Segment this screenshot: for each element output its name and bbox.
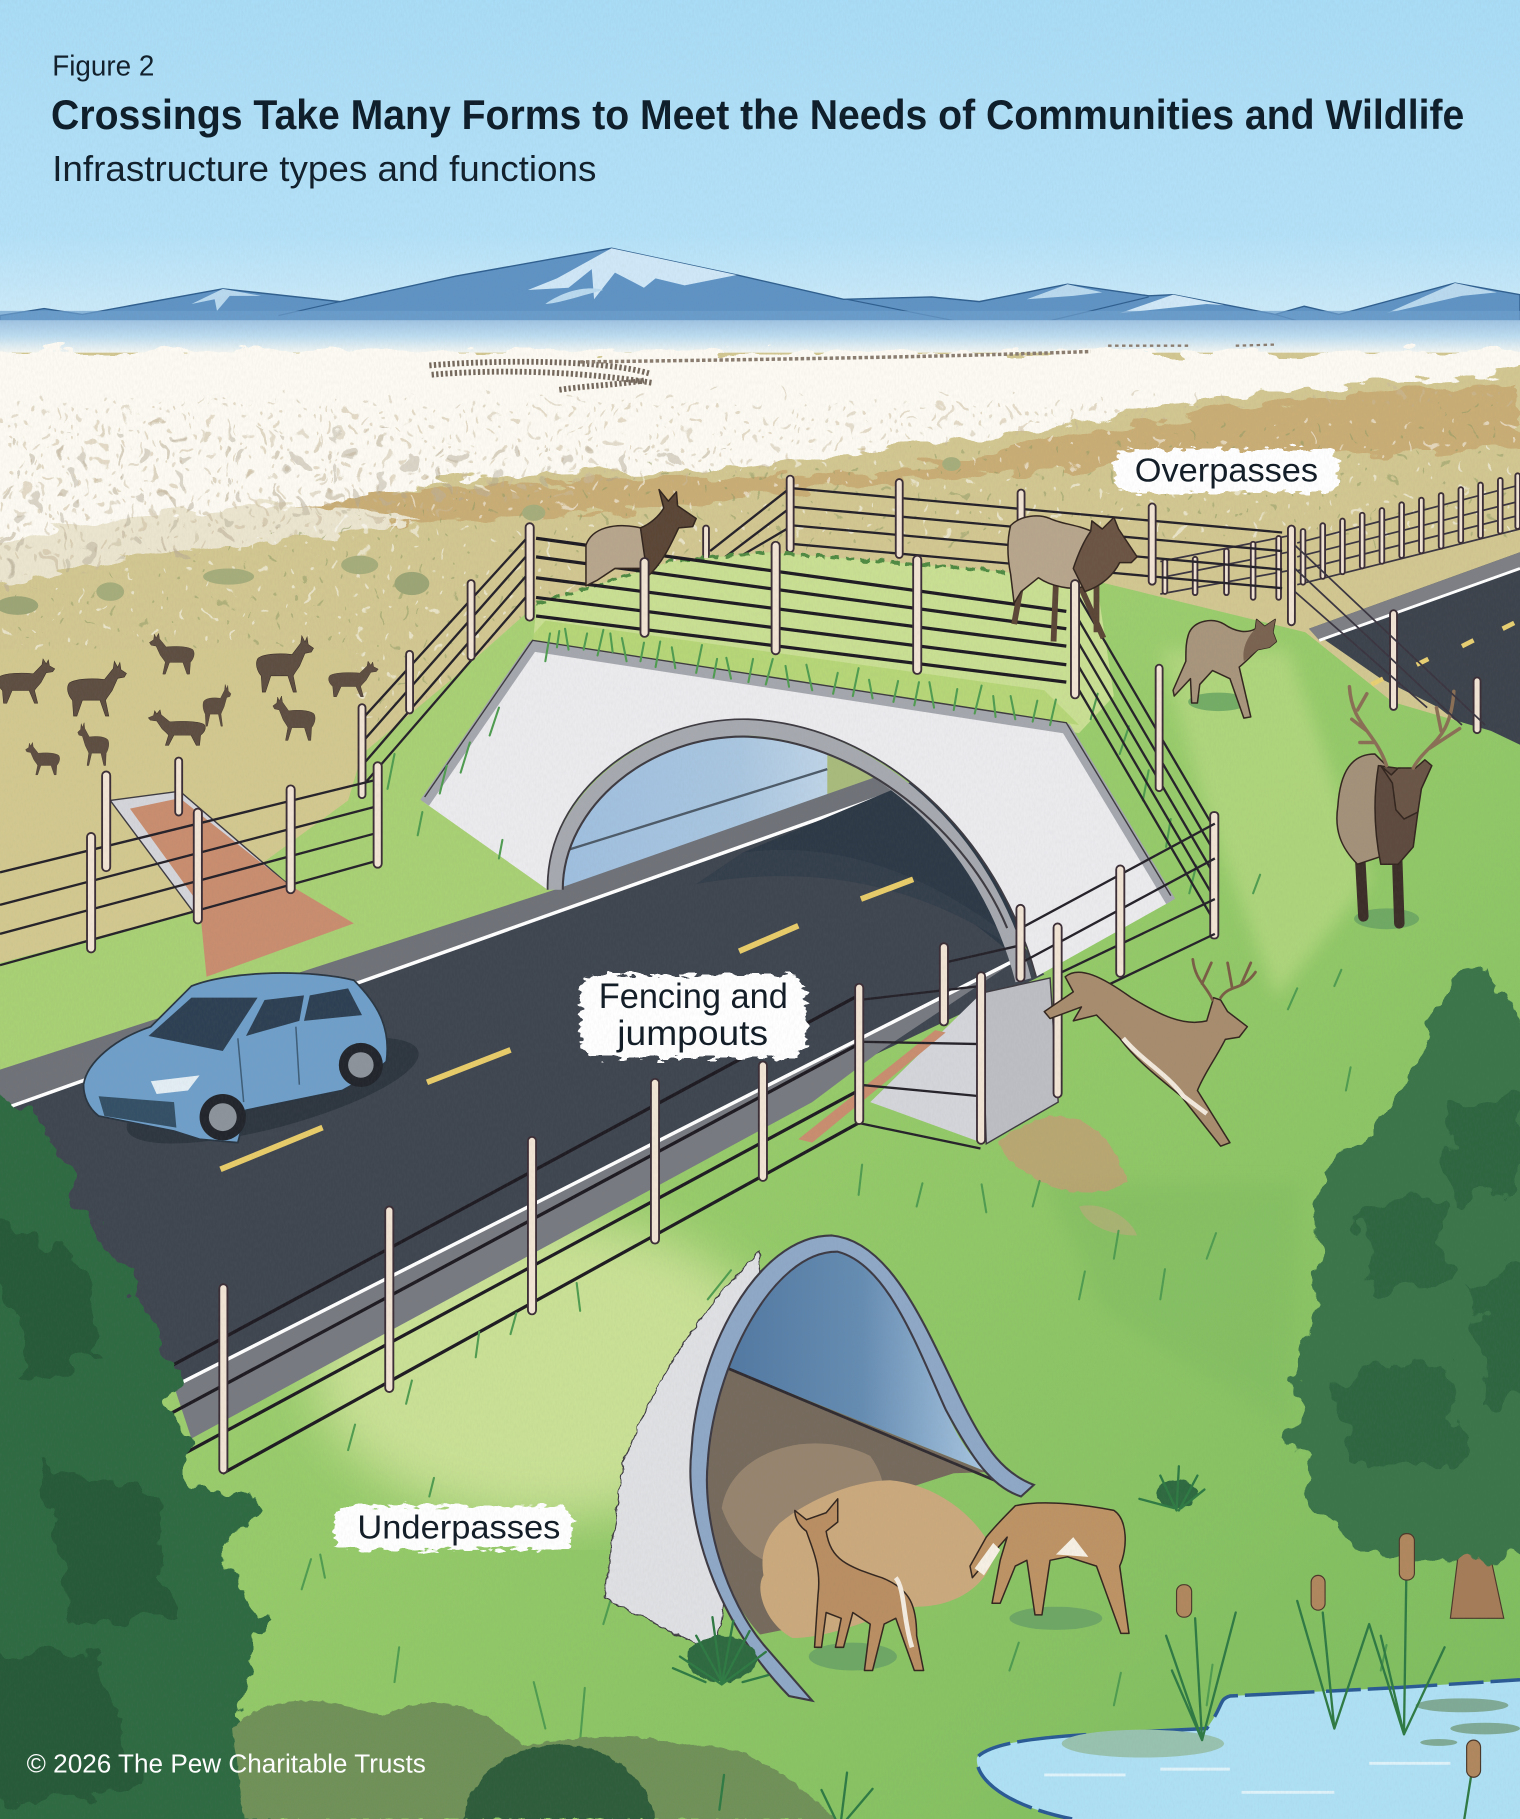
title: Crossings Take Many Forms to Meet the Needs of Communities and Wildlife [51, 91, 1464, 138]
culvert underpass [605, 1235, 1034, 1701]
overpass back fence [696, 476, 1295, 625]
culvert interior [708, 1252, 987, 1472]
cattails [1166, 1534, 1481, 1819]
label: Overpasses [1114, 449, 1339, 493]
figure number: Figure 2 [52, 50, 154, 82]
main road [0, 775, 1044, 1496]
left tree [0, 1079, 278, 1819]
right jumpout [798, 978, 1137, 1235]
bull elk with antlers [1337, 687, 1460, 929]
pond [977, 1680, 1520, 1819]
tan field left of the overpass [0, 650, 362, 963]
foreground bushes [232, 1701, 873, 1819]
blue car [84, 973, 428, 1165]
right tree [1294, 963, 1520, 1618]
left jumpout [0, 758, 382, 977]
left side overpass fence [359, 539, 526, 798]
fawn [795, 1499, 924, 1671]
horizon haze band [0, 320, 1520, 355]
distant elk herd [0, 633, 378, 775]
grazing deer [970, 1503, 1129, 1633]
elk on overpass, centre [1008, 516, 1137, 642]
mountain range [0, 248, 1520, 325]
copyright: © 2026 The Pew Charitable Trusts [27, 1751, 426, 1779]
jumping deer [1044, 959, 1255, 1146]
label: Underpasses: Underpasses [357, 1509, 560, 1546]
label: Fencing and jumpouts: Fencing and [599, 977, 788, 1016]
sky background [0, 0, 1520, 348]
subtitle: Infrastructure types and functions [52, 148, 596, 189]
overpass bridge wall and arch [425, 640, 1171, 980]
scattered grass tufts [302, 875, 1399, 1775]
label: Fencing and jumpouts [580, 974, 805, 1058]
elk calf on slope [1173, 619, 1276, 718]
right side overpass fence [1079, 597, 1218, 939]
roadside fence and jumpout fence [133, 545, 1485, 1473]
overpass hill and foreground grass [0, 552, 1520, 1819]
dark shrub at culvert [673, 1617, 768, 1684]
tunnel interior wall [563, 737, 917, 916]
elk on overpass, far left [586, 490, 696, 586]
far road segment [1309, 552, 1520, 748]
label: Underpasses [334, 1506, 573, 1550]
overpass front fence [526, 523, 1066, 682]
far plain with snow, scrub and migrating herd [0, 345, 1520, 1095]
overpass front fence posts in front of elk [640, 558, 1079, 698]
label: Fencing and jumpouts: jumpouts [616, 1014, 768, 1053]
dark shrub right of deer [1139, 1466, 1204, 1510]
grass blades around overpass [290, 629, 1196, 893]
far roadside fence [1160, 473, 1520, 600]
label: Overpasses: Overpasses [1135, 452, 1318, 489]
left grass verge [0, 609, 555, 1070]
culvert rim [690, 1235, 1034, 1701]
